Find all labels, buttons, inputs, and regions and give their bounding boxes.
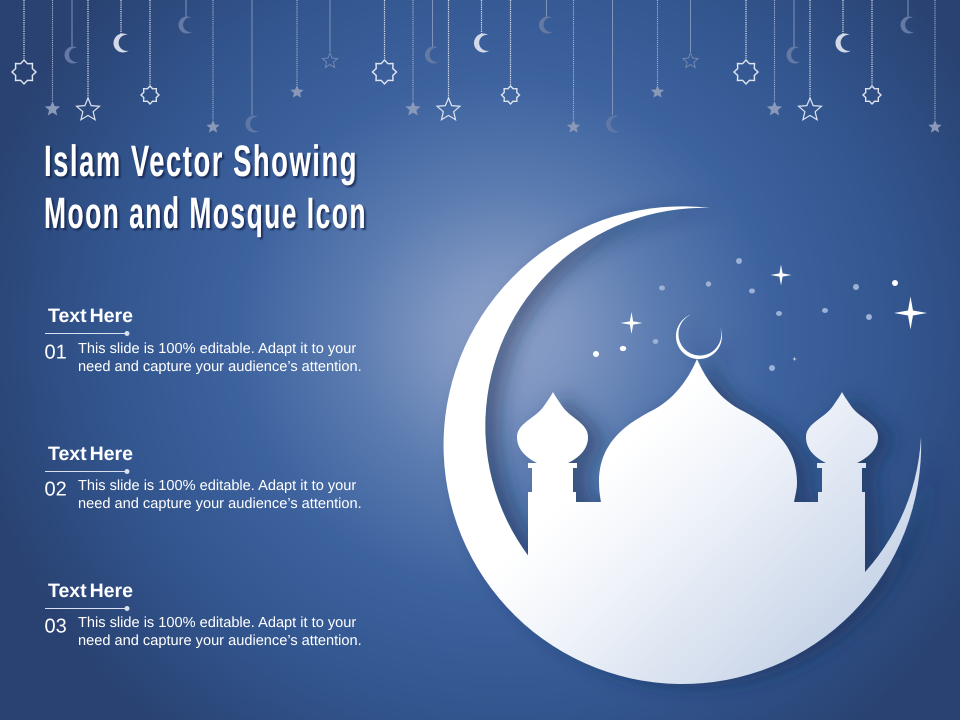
item 01 rule [45,331,130,336]
item 01 body text [78,341,362,375]
item 03 number: 03 [44,616,67,638]
dim dots [653,258,872,371]
item 03 [44,580,362,649]
item 02 body text [78,478,362,512]
title: Islam Vector Showing [44,137,358,186]
item 01 body text: need and capture your audience’s attention. [78,359,362,375]
item 03 body text [78,615,362,649]
item 02 body text: need and capture your audience’s attention. [78,496,362,512]
night sky stars and dots [593,258,927,371]
item 01 heading: Text Here [48,305,133,327]
item 02 body text: This slide is 100% editable. Adapt it to your [78,478,356,494]
crescent moon [444,206,921,684]
mosque silhouette [517,359,878,666]
item 02 number: 02 [44,478,67,500]
moon and mosque icon [444,206,921,684]
item 02 rule [45,469,130,474]
item 02 heading: Text Here [48,443,133,465]
item 02 [44,443,362,512]
sparkle stars [620,264,927,362]
item 03 heading: Text Here [48,580,133,602]
item 01 body text: This slide is 100% editable. Adapt it to your [78,341,356,357]
item 03 rule [45,606,130,611]
title: Moon and Mosque Icon [44,189,367,238]
hanging stars and moons [12,0,960,133]
item 01 number: 01 [44,342,67,364]
item 01 [44,305,362,375]
finial crescent [676,314,722,359]
item 03 body text: This slide is 100% editable. Adapt it to your [78,615,356,631]
title [44,137,367,238]
item 03 body text: need and capture your audience’s attention. [78,633,362,649]
bright dots [593,280,898,357]
